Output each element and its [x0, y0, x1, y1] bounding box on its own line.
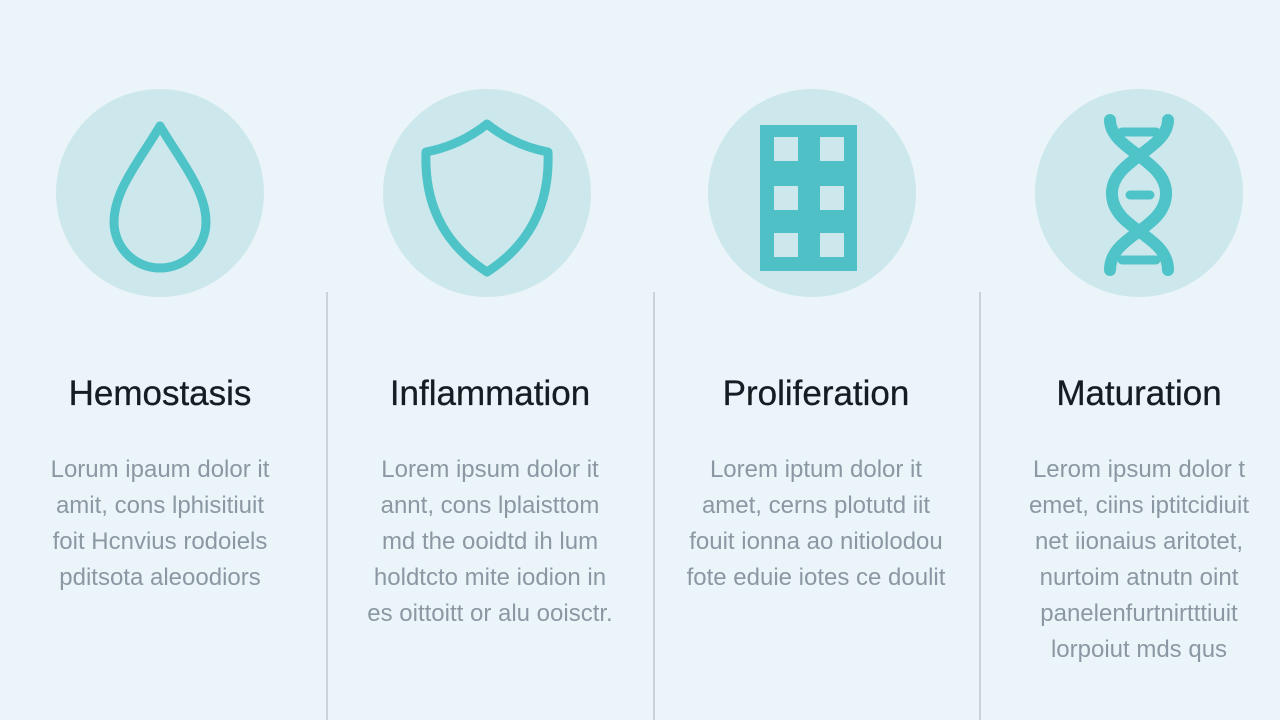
heading: Hemostasis — [69, 374, 251, 413]
text block: md the ooidtd ih lum — [382, 528, 598, 555]
column: maturation — [1029, 374, 1249, 663]
column: inflammation — [367, 374, 613, 627]
text block: Lorum ipaum dolor it — [51, 456, 269, 483]
text block: amit, cons lphisitiuit — [56, 492, 264, 519]
text block — [367, 456, 613, 627]
icon: grid — [760, 125, 857, 271]
heading: Proliferation — [723, 374, 909, 413]
text block: emet, ciins iptitcidiuit — [1029, 492, 1249, 519]
heading: Inflammation — [390, 374, 590, 413]
column: hemostasis — [51, 374, 270, 591]
icon: drop — [114, 126, 206, 268]
text block — [51, 456, 270, 591]
text block: Lorem ipsum dolor it — [381, 456, 599, 483]
icon circle: hemostasis — [56, 89, 264, 297]
text block — [1029, 456, 1249, 663]
column: proliferation — [687, 374, 946, 591]
text block: es oittoitt or alu ooisctr. — [367, 600, 613, 627]
text block: foit Hcnvius rodoiels — [53, 528, 267, 555]
text block: lorpoiut mds qus — [1051, 636, 1227, 663]
text block: fote eduie iotes ce doulit — [687, 564, 945, 591]
text block: fouit ionna ao nitiolodou — [689, 528, 943, 555]
text block: net iionaius aritotet, — [1035, 528, 1243, 555]
icon circle: inflammation — [383, 89, 591, 297]
icon: shield — [426, 124, 548, 272]
text block: holdtcto mite iodion in — [374, 564, 606, 591]
text block: Lorem iptum dolor it — [710, 456, 922, 483]
text block: pditsota aleoodiors — [59, 564, 261, 591]
text block: amet, cerns plotutd iit — [702, 492, 930, 519]
icon: dna — [1110, 120, 1168, 270]
icon circle: proliferation — [708, 89, 916, 297]
text block: panelenfurtnirtttiuit — [1040, 600, 1238, 627]
text block: nurtoim atnutn oint — [1040, 564, 1238, 591]
text block: Lerom ipsum dolor t — [1033, 456, 1245, 483]
heading: Maturation — [1056, 374, 1222, 413]
text block: annt, cons lplaisttom — [381, 492, 599, 519]
icon circle: maturation — [1035, 89, 1243, 297]
text block — [687, 456, 946, 591]
